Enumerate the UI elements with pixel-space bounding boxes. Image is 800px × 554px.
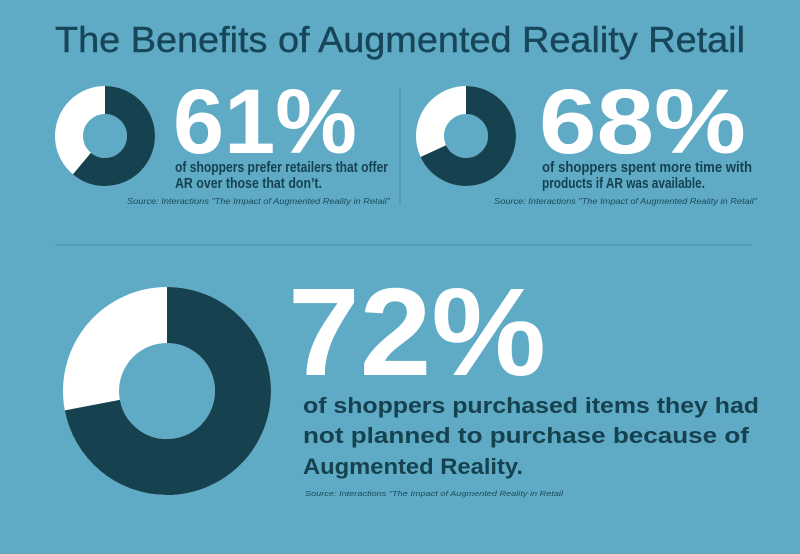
- panel: stat 72%: [91, 263, 759, 498]
- source: Source: Interactions "The Impact of Augmented Reality in Retail": [127, 197, 391, 206]
- big number 72%: 72%: [288, 263, 546, 402]
- description: of shoppers purchased items they had: [303, 393, 759, 418]
- description: of shoppers spent more time with: [542, 160, 752, 176]
- source: Source: Interactions "The Impact of Augmented Reality in Retail": [494, 197, 758, 206]
- panel: stat 61%: [69, 71, 391, 206]
- description: products if AR was available.: [542, 176, 705, 192]
- description: AR over those that don’t.: [175, 176, 322, 192]
- big number 68%: 68%: [539, 71, 746, 173]
- description: not planned to purchase because of: [303, 423, 750, 448]
- big number 61%: 61%: [173, 71, 357, 173]
- donut chart 61%: [69, 100, 141, 172]
- donut chart 72%: [91, 315, 243, 467]
- description: Augmented Reality.: [303, 454, 523, 479]
- donut chart 68%: [430, 100, 502, 172]
- panel: stat 68%: [430, 71, 758, 206]
- description: of shoppers prefer retailers that offer: [175, 160, 388, 176]
- title: The Benefits of Augmented Reality Retail: [55, 19, 745, 60]
- source: Source: Interactions "The Impact of Augmented Reality in Retail: [305, 489, 563, 498]
